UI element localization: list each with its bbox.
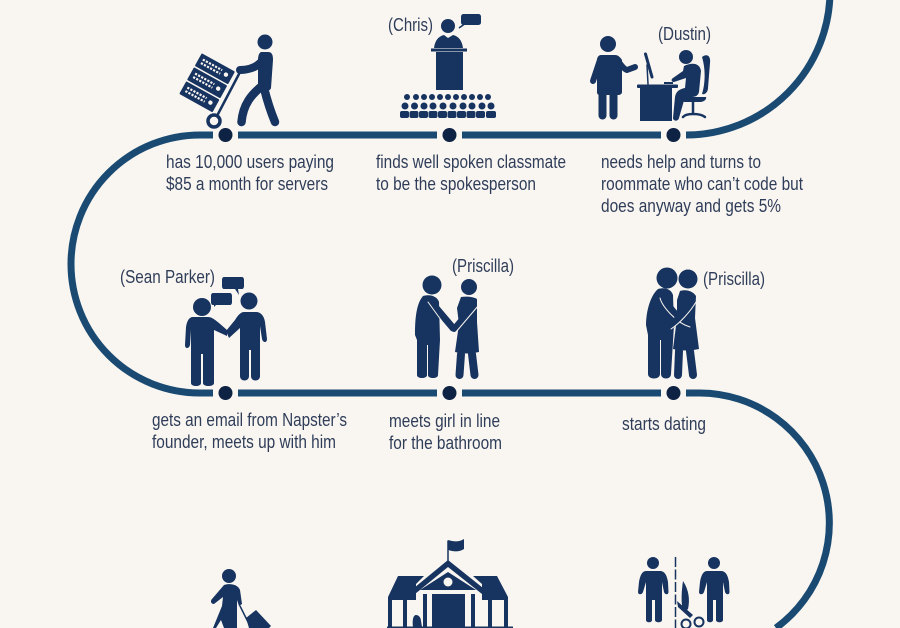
label: Priscilla (meeting): (Priscilla) xyxy=(452,256,514,276)
icon: man and woman holding hands xyxy=(415,276,479,378)
caption: needs help: roommate who can’t code but xyxy=(601,174,803,194)
label: Chris: (Chris) xyxy=(388,15,433,35)
label: Dustin: (Dustin) xyxy=(658,24,711,44)
caption: gets an email: gets an email from Napster’s xyxy=(152,410,347,430)
label: Priscilla (dating): (Priscilla) xyxy=(703,269,765,289)
caption: starts dating: starts dating xyxy=(622,414,706,434)
caption: needs help: does anyway and gets 5% xyxy=(601,196,781,216)
icon: person asking coder at desk xyxy=(593,36,710,121)
icon: couple embracing xyxy=(646,268,699,378)
caption: has 10,000 users: has 10,000 users paying xyxy=(166,152,334,172)
timeline dots xyxy=(218,128,680,400)
caption: finds classmate xyxy=(376,152,566,194)
icon: school building with flag xyxy=(387,539,513,628)
label: Sean Parker: (Sean Parker) xyxy=(120,267,215,287)
caption: meets girl xyxy=(389,411,502,453)
caption: gets an email: founder, meets up with him xyxy=(152,432,336,452)
caption: gets an email xyxy=(152,410,347,452)
caption: finds classmate: to be the spokesperson xyxy=(376,174,536,194)
icon: speaker at podium with audience xyxy=(400,14,496,118)
caption: needs help xyxy=(601,152,803,216)
caption: has 10,000 users xyxy=(166,152,334,194)
icon: two people separated by scissors xyxy=(638,557,730,628)
caption: meets girl: for the bathroom xyxy=(389,433,502,453)
caption: finds classmate: finds well spoken classmate xyxy=(376,152,566,172)
icon: person walking with suitcase xyxy=(211,569,271,628)
caption: has 10,000 users: $85 a month for servers xyxy=(166,174,328,194)
icon: person pushing server cart xyxy=(179,34,275,127)
caption: needs help: needs help and turns to xyxy=(601,152,761,172)
caption: meets girl: meets girl in line xyxy=(389,411,500,431)
icon: two people shaking hands with speech bubbles xyxy=(185,277,267,386)
